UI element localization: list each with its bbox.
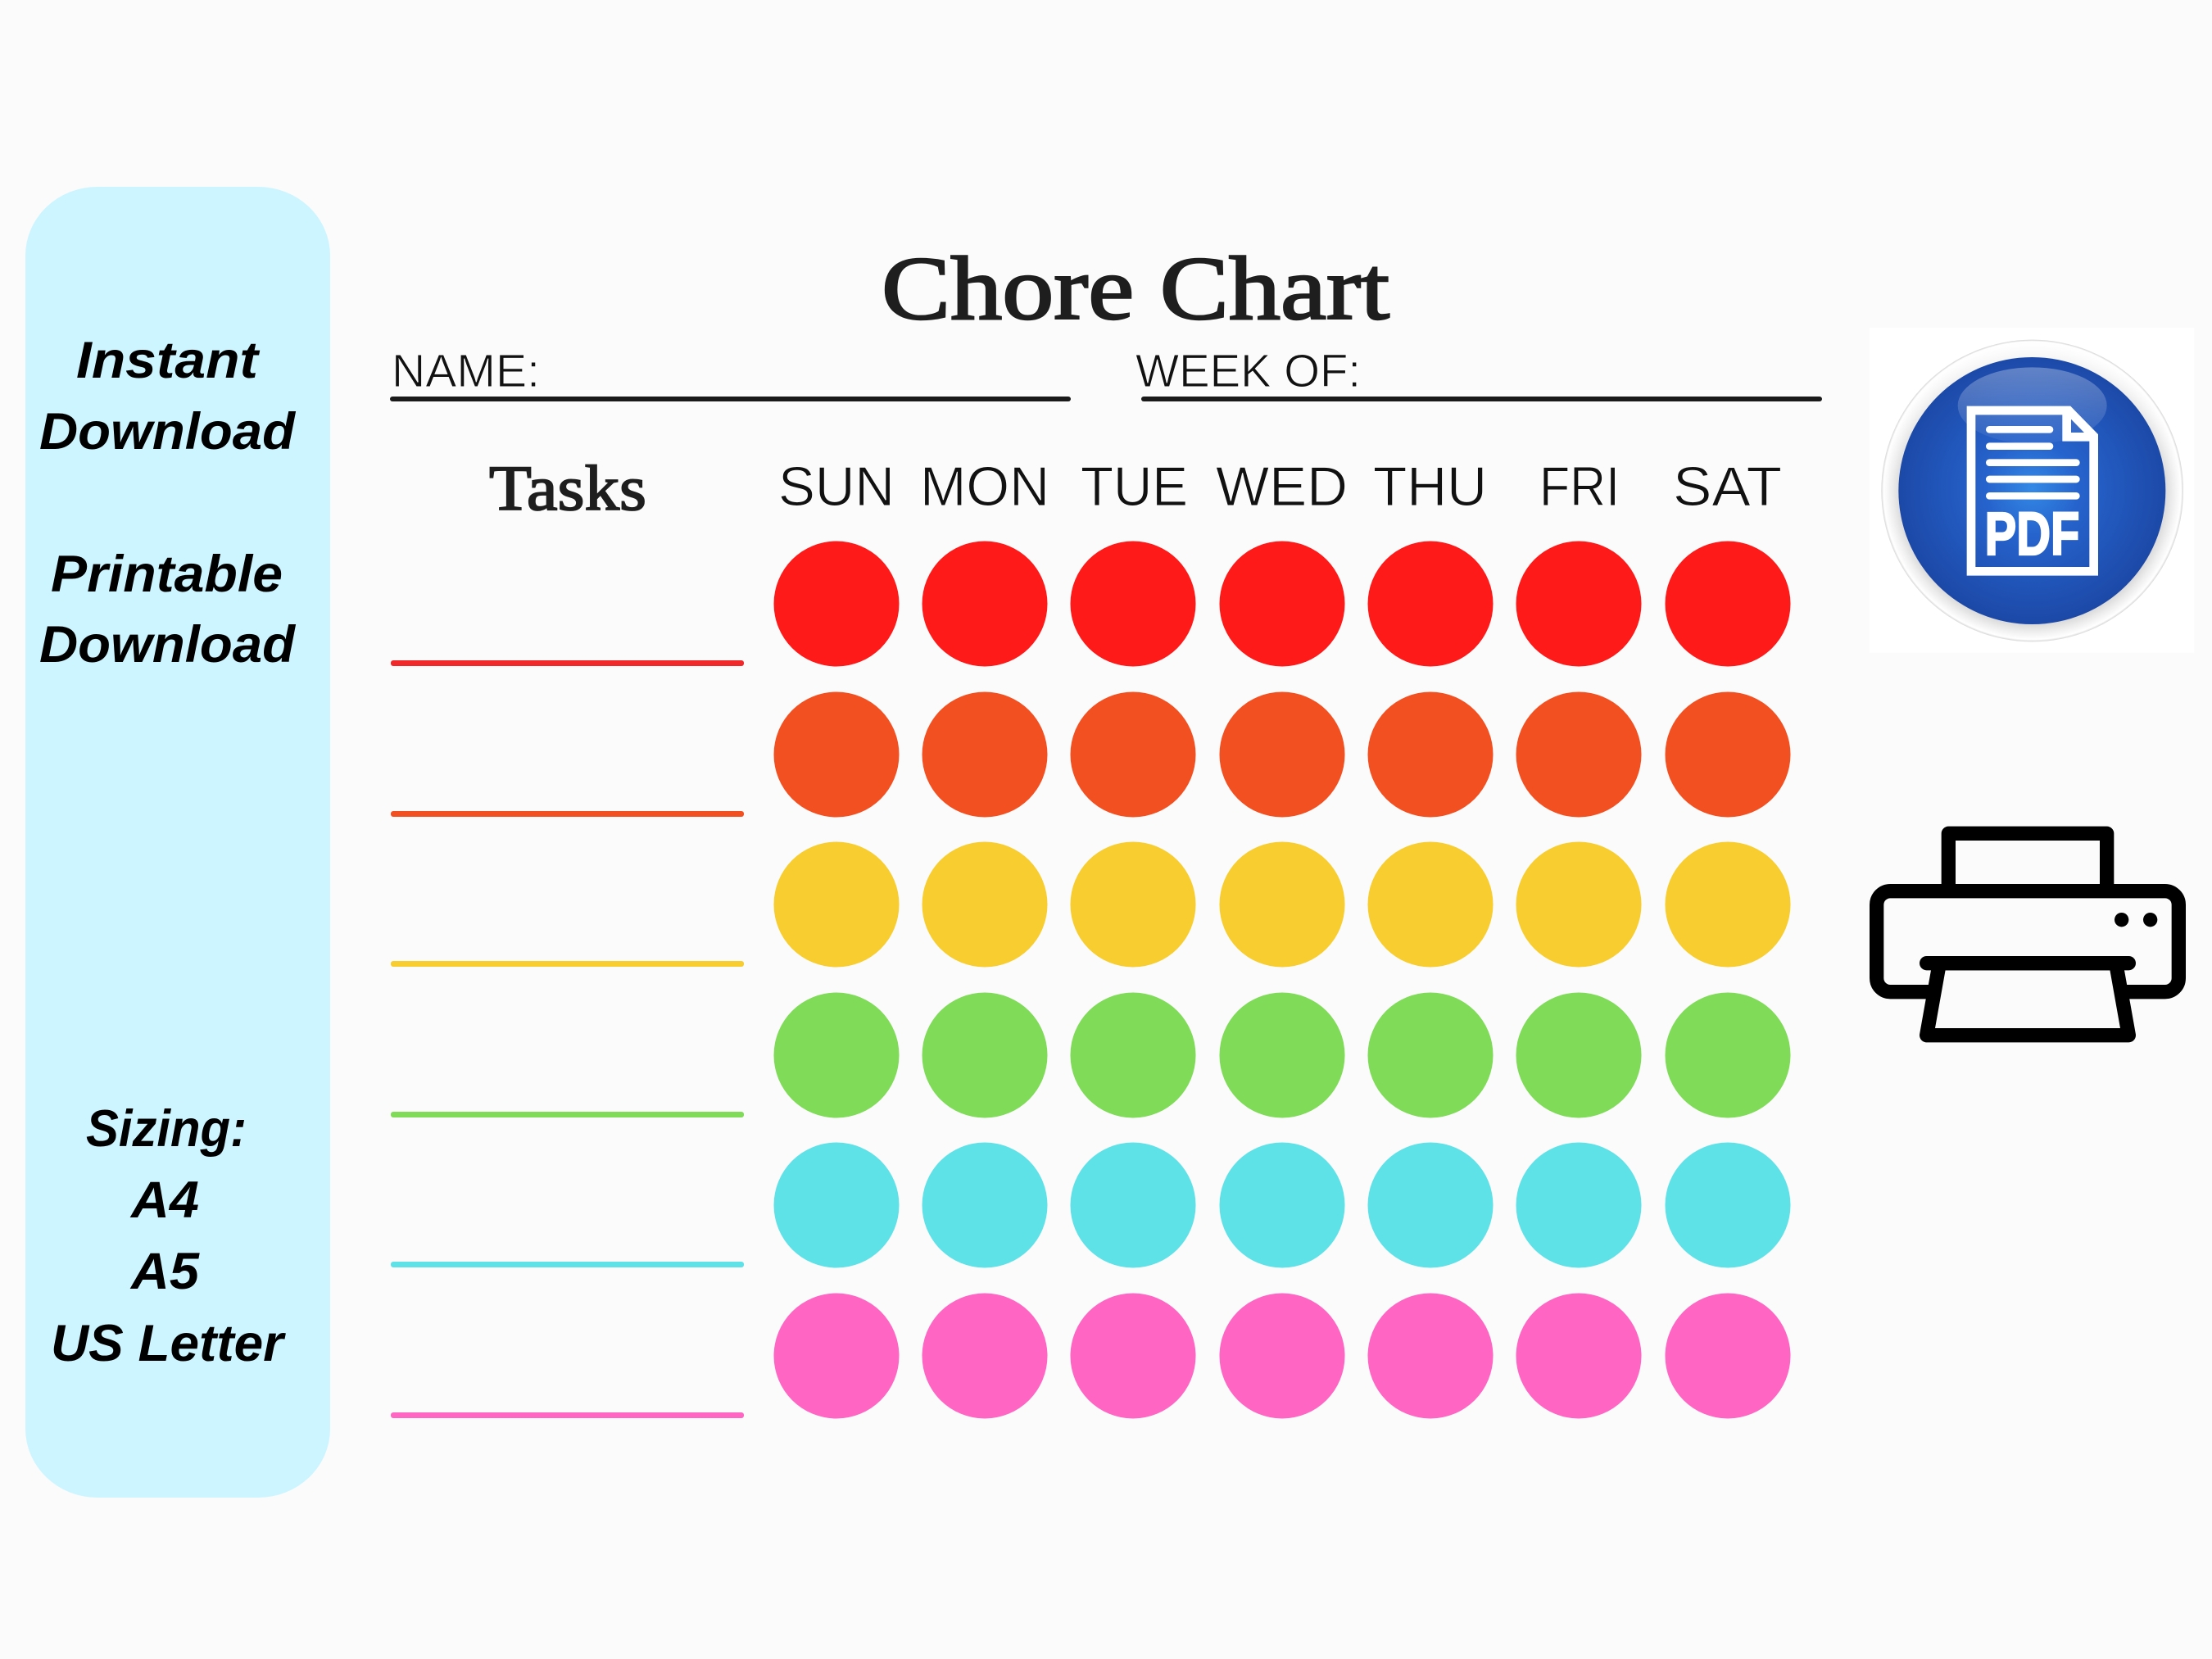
row 6: pink — [391, 1293, 1791, 1419]
text: sizing options: US Letter — [51, 1315, 287, 1372]
text: printable download: Download — [39, 616, 297, 673]
weekday headers — [778, 456, 1782, 518]
text: instant download — [39, 332, 297, 460]
weekday headers: SUN — [778, 456, 895, 518]
weekday headers: WED — [1216, 456, 1348, 518]
panel: product features sidebar — [25, 187, 330, 1498]
week of field: WEEK OF: — [1135, 345, 1361, 397]
weekday headers: SAT — [1673, 456, 1782, 518]
text: sizing options: A4 — [129, 1172, 199, 1229]
row 5: cyan — [391, 1142, 1791, 1268]
text: printable download: Printable — [51, 546, 283, 603]
icon: PDF button — [1870, 328, 2194, 653]
document icon — [1971, 410, 2094, 571]
text: instant download: Download — [39, 403, 297, 460]
name field: NAME: — [392, 345, 540, 397]
week of field — [1135, 345, 1822, 401]
tasks heading: Tasks — [489, 452, 646, 524]
name field — [390, 345, 1071, 401]
icon: printer — [1877, 833, 2178, 1036]
title: Chore Chart — [882, 238, 1389, 338]
row 1: red — [391, 541, 1791, 667]
text: sizing options: A5 — [129, 1243, 200, 1300]
text: printable download — [39, 546, 297, 673]
document icon: PDF — [1985, 500, 2079, 568]
weekday headers: MON — [920, 456, 1049, 518]
weekday headers: THU — [1373, 456, 1487, 518]
text: sizing options: Sizing: — [86, 1100, 247, 1158]
row 2: orange — [391, 691, 1791, 818]
row 4: green — [391, 993, 1791, 1117]
weekday headers: FRI — [1539, 456, 1620, 518]
text: instant download: Instant — [76, 332, 261, 389]
text: sizing options — [51, 1100, 287, 1372]
weekday headers: TUE — [1081, 456, 1188, 518]
row 3: yellow — [391, 842, 1791, 967]
